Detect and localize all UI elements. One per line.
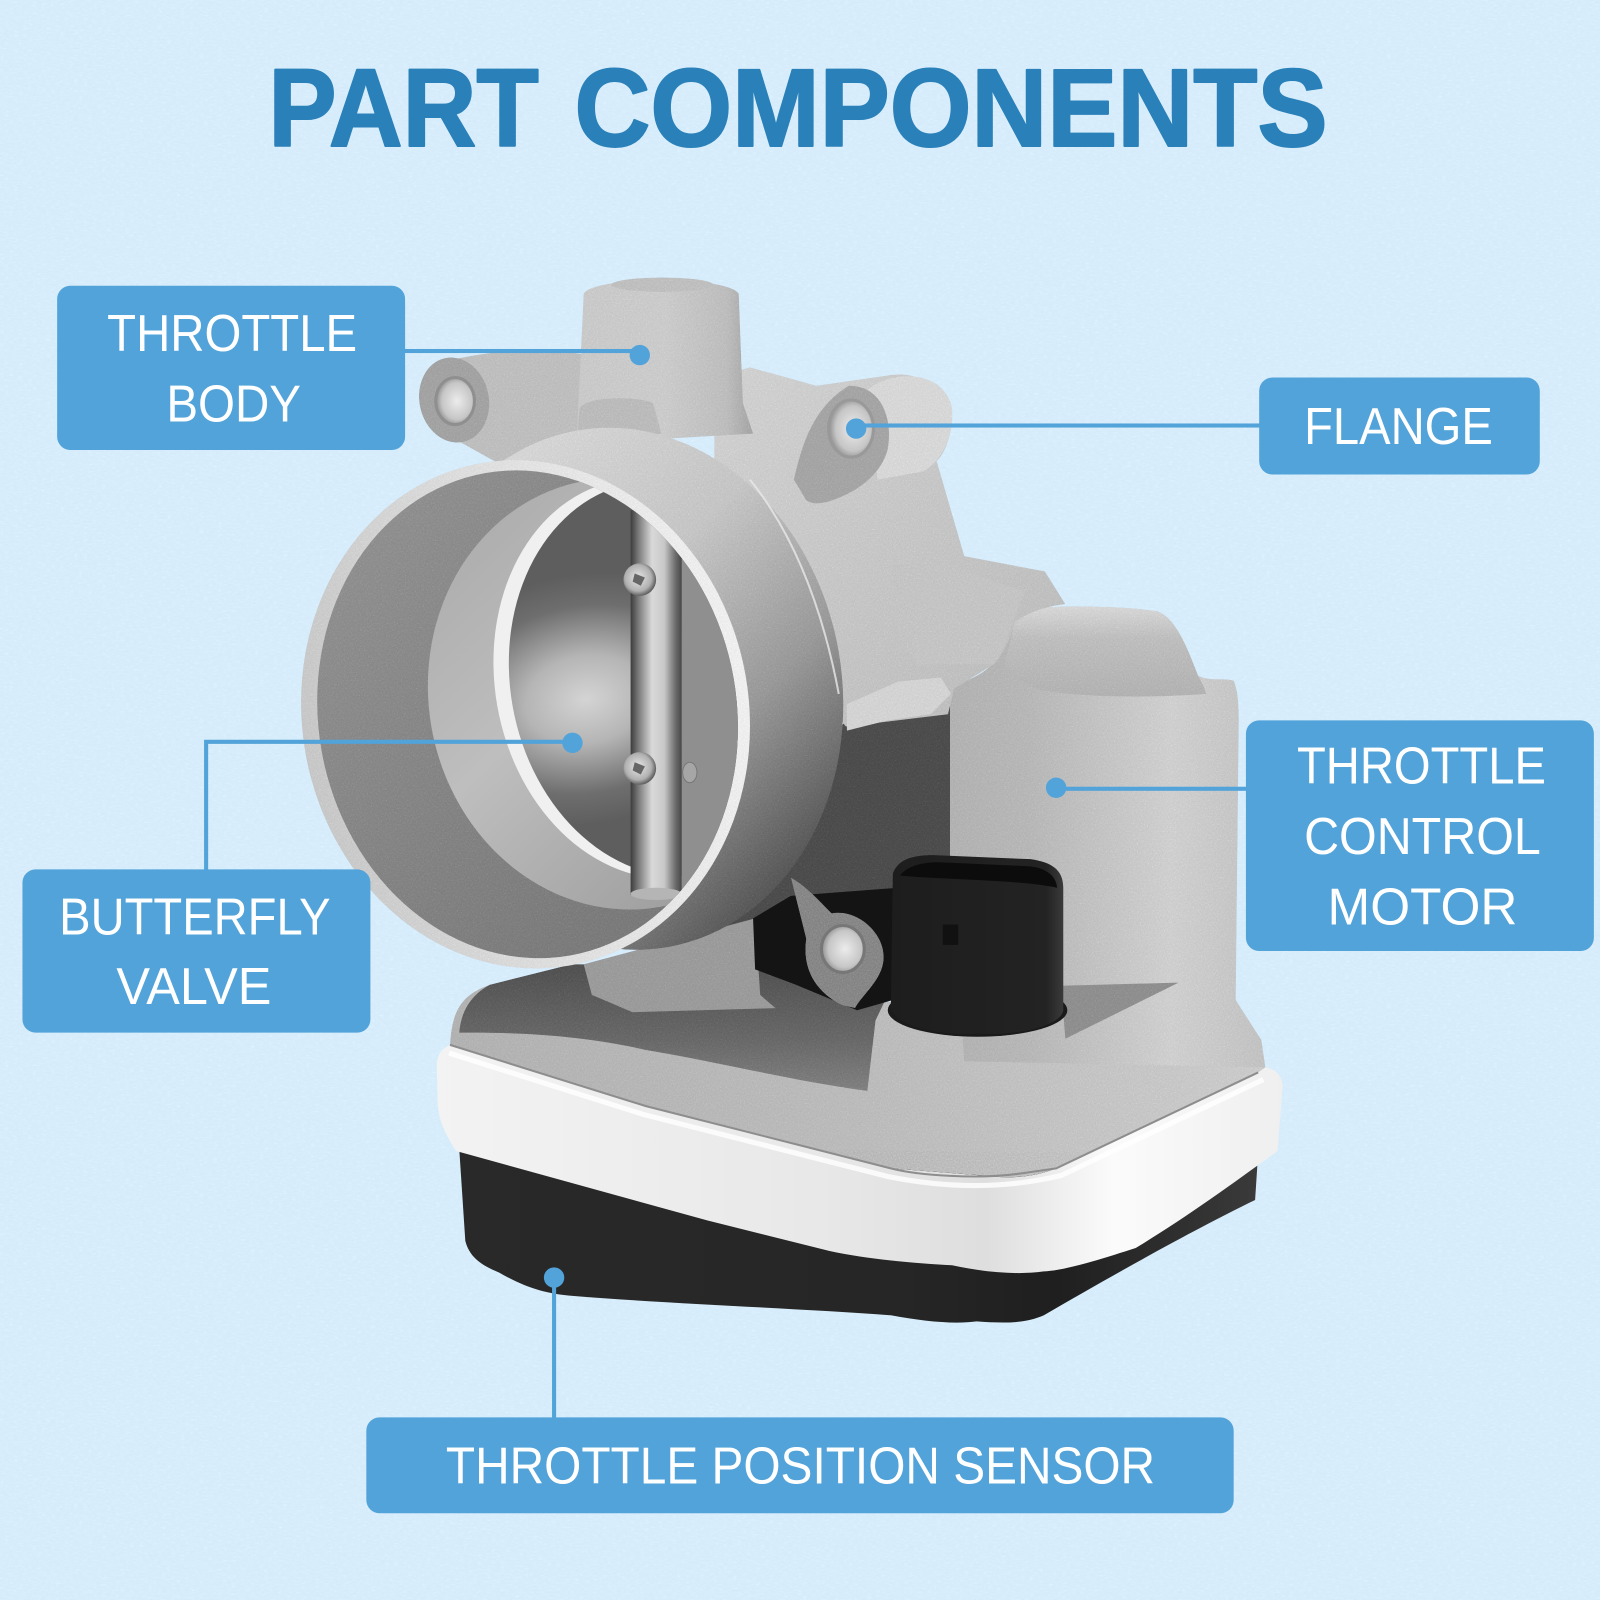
dark recess behind the bore (704, 704, 951, 944)
lower mounting lug (791, 878, 884, 1008)
label text: BUTTERFLY (59, 889, 331, 947)
title: PART (268, 47, 539, 170)
right lug hole (829, 400, 873, 457)
title: COMPONENTS (574, 47, 1328, 170)
dot (630, 345, 650, 365)
gear housing between bore and motor (714, 367, 1065, 727)
dot (1046, 778, 1066, 798)
connector opening (900, 862, 1057, 888)
dot (562, 733, 583, 753)
right lug rear lobe (867, 376, 952, 480)
connector latch (943, 924, 958, 945)
label box (366, 1417, 1234, 1513)
dark mechanism below bore (753, 888, 898, 1010)
label text (59, 889, 331, 1016)
pedestal under the bore (584, 918, 776, 1012)
connector socket (888, 984, 1067, 1037)
black sensor housing at the bottom (459, 1148, 1258, 1323)
label text (1297, 738, 1546, 936)
callout: throttle control motor (1046, 720, 1594, 951)
upper screw (623, 563, 656, 596)
lower housing shaded top surface (459, 964, 888, 1091)
leader line (552, 1278, 556, 1418)
label text: THROTTLE (1297, 738, 1546, 796)
motor cylinder (950, 607, 1265, 1067)
bore wall (317, 470, 738, 958)
leader line (206, 742, 571, 870)
butterfly plate (508, 492, 738, 876)
white crescent edge (494, 488, 738, 878)
connector plug (888, 855, 1067, 1037)
label text: MOTOR (1328, 878, 1517, 936)
stem top opening (611, 278, 713, 292)
product: throttle body assembly (261, 278, 1283, 1323)
callout: throttle body (57, 286, 650, 450)
plate right half (682, 558, 738, 890)
flange lip shading (450, 1045, 1258, 1176)
label box (22, 869, 370, 1033)
left lug hole (436, 378, 474, 424)
bore rim (261, 424, 790, 1004)
leader line (1056, 787, 1247, 791)
arm from left lug to stem (454, 350, 587, 464)
motor dome cap (1005, 607, 1206, 697)
callout: butterfly valve (22, 733, 583, 1033)
dot (846, 418, 866, 439)
light metal flange band (437, 1045, 1283, 1273)
leader line (855, 423, 1260, 428)
gear housing upper ledge block (892, 564, 1026, 664)
connector body (891, 855, 1063, 1034)
gear housing lower shelf (847, 678, 951, 731)
stepped inner ring (428, 482, 690, 910)
shaft end (631, 888, 682, 900)
casting seam on body (750, 480, 839, 694)
stem foot block (577, 398, 661, 449)
right mounting lug (794, 386, 889, 503)
title (268, 47, 1328, 170)
stem (577, 280, 753, 444)
leader line (404, 349, 639, 353)
label text: BODY (166, 375, 301, 433)
label text: VALVE (116, 958, 271, 1016)
label text: CONTROL (1304, 808, 1541, 866)
lower lug pin (821, 926, 864, 972)
callout: flange (846, 378, 1540, 474)
label text: FLANGE (1304, 398, 1493, 456)
lower screw (623, 752, 656, 785)
rivet on plate (683, 762, 697, 783)
label text (107, 305, 357, 433)
main bore casting (361, 392, 884, 985)
left mounting lug (411, 351, 497, 449)
dot (544, 1267, 564, 1288)
flange lip highlight (449, 1053, 1263, 1186)
label text: THROTTLE (107, 305, 357, 363)
shaft (631, 510, 682, 895)
label text: THROTTLE POSITION SENSOR (446, 1438, 1155, 1496)
label box (1259, 378, 1540, 474)
label box (1246, 720, 1594, 951)
cast metal parts with grain (261, 278, 1265, 1177)
shadow beside the connector (1061, 983, 1179, 1039)
label box (57, 286, 405, 450)
butterfly bore interior (317, 470, 738, 958)
callout: throttle position sensor (366, 1267, 1234, 1513)
lower housing front face (450, 985, 1265, 1177)
